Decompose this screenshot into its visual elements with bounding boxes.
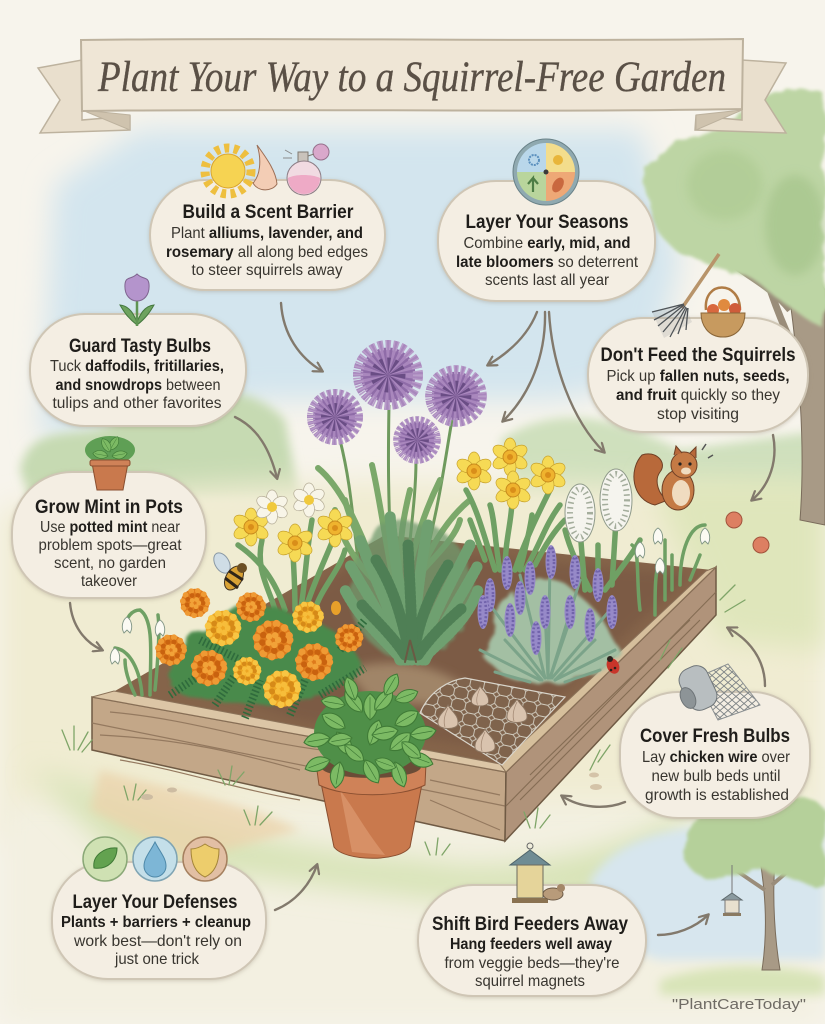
- heading: defenses: Layer Your Defenses: [72, 892, 238, 913]
- icon: shield badge: [183, 837, 227, 881]
- icon: water drop badge: [133, 837, 177, 881]
- icon: chicken wire roll: [675, 662, 760, 720]
- icon: perfume bottle: [283, 144, 329, 195]
- hyacinths: [565, 469, 640, 590]
- tree: upper right: [647, 88, 825, 525]
- heading: cover bulbs: Cover Fresh Bulbs: [640, 726, 790, 747]
- body: defenses: just one trick: [114, 951, 200, 968]
- panel: don't feed the squirrels: [588, 318, 808, 432]
- icon: small mint pot: [85, 435, 135, 490]
- lavender: [478, 545, 618, 683]
- body: bird feeders: [444, 936, 620, 990]
- body: bird feeders: from veggie beds—they're: [444, 955, 620, 972]
- small tree: lower right: [683, 795, 825, 970]
- icon: basket of fruit: [701, 288, 745, 337]
- body: defenses: Plants + barriers + cleanup: [61, 914, 251, 931]
- body: scent barrier: Plant alliums, lavender, and: [171, 225, 363, 242]
- snowdrops right: [632, 525, 710, 615]
- icon: tulip: [120, 274, 154, 326]
- body: mint: problem spots—great: [38, 537, 182, 554]
- body: mint: Use potted mint near: [40, 519, 181, 536]
- panel: build a scent barrier: [150, 180, 385, 290]
- body: cover bulbs: [642, 749, 791, 804]
- body: cover bulbs: growth is established: [645, 787, 789, 804]
- chicken wire with bulbs: [420, 678, 565, 765]
- body: guard bulbs: tulips and other favorites: [52, 395, 222, 412]
- panel: layer your defenses: [52, 862, 266, 979]
- body: don't feed: stop visiting: [657, 406, 739, 423]
- body: seasons: late bloomers so deterrent: [456, 254, 639, 271]
- watermark credit: "PlantCareToday": [672, 996, 806, 1013]
- heading: bird feeders: Shift Bird Feeders Away: [432, 914, 628, 935]
- ladybug: [604, 656, 622, 676]
- body: guard bulbs: and snowdrops between: [56, 377, 220, 394]
- body: mint: [38, 519, 182, 590]
- panel: grow mint in pots: [12, 472, 206, 598]
- panel: guard tasty bulbs: [30, 314, 246, 426]
- body: scent barrier: to steer squirrels away: [192, 262, 342, 279]
- title text: Plant Your Way to a Squirrel-Free Garden: [97, 54, 726, 101]
- icon: rake: [652, 254, 719, 338]
- icon: leaf badge: [83, 837, 127, 881]
- bed right wall: [505, 567, 716, 841]
- snowdrops left: [110, 610, 165, 695]
- banner body: [81, 39, 743, 111]
- body: guard bulbs: [50, 358, 224, 412]
- hanging feeder: [722, 865, 742, 916]
- panel: layer your seasons: [438, 181, 655, 301]
- body: defenses: [61, 914, 251, 968]
- body: don't feed: and fruit quickly so they: [616, 387, 780, 404]
- bed left wall: [92, 697, 506, 841]
- title banner: [38, 39, 786, 133]
- icon: bird feeder: [510, 843, 565, 903]
- body: seasons: scents last all year: [485, 272, 610, 289]
- icon: nose: [253, 145, 277, 190]
- body: seasons: Combine early, mid, and: [464, 235, 630, 252]
- alliums: [311, 345, 482, 590]
- icon: seasons clock: [513, 139, 579, 205]
- bed soil: [108, 535, 712, 770]
- terracotta pot: [316, 756, 426, 858]
- body: cover bulbs: new bulb beds until: [652, 768, 780, 785]
- heading: scent barrier: Build a Scent Barrier: [182, 202, 354, 223]
- grass tufts and pebbles: [62, 585, 745, 855]
- heading: guard bulbs: Guard Tasty Bulbs: [69, 336, 211, 357]
- right ribbon tail: [695, 60, 786, 133]
- fallen apples: [726, 512, 769, 553]
- heading: mint: Grow Mint in Pots: [35, 497, 183, 518]
- heading: don't feed: Don't Feed the Squirrels: [600, 345, 796, 366]
- bee: [210, 550, 247, 593]
- body: bird feeders: squirrel magnets: [475, 973, 585, 990]
- raised garden bed: [92, 535, 716, 841]
- body: scent barrier: rosemary all along bed edges: [166, 244, 368, 261]
- left ribbon tail: [38, 60, 130, 133]
- arrows: [70, 303, 774, 935]
- daffodils left: [232, 483, 354, 612]
- body: scent barrier: [166, 225, 368, 279]
- daffodils right: [455, 438, 567, 570]
- rosemary: [345, 515, 478, 662]
- potted mint: [303, 671, 437, 858]
- body: don't feed: Pick up fallen nuts, seeds,: [606, 368, 790, 385]
- marigolds: [156, 589, 365, 718]
- icon: sun: [205, 148, 251, 194]
- body: bird feeders: Hang feeders well away: [450, 936, 612, 953]
- body: mint: scent, no garden: [54, 555, 166, 572]
- body: guard bulbs: Tuck daffodils, fritillaries,: [50, 358, 224, 375]
- body: seasons: [456, 235, 639, 289]
- body: cover bulbs: Lay chicken wire over: [642, 749, 791, 766]
- body: mint: takeover: [81, 573, 138, 590]
- squirrel: [634, 444, 713, 510]
- heading: seasons: Layer Your Seasons: [466, 212, 628, 233]
- panel: shift bird feeders away: [418, 885, 646, 996]
- body: don't feed: [606, 368, 790, 423]
- panel: cover fresh bulbs: [620, 692, 810, 818]
- body: defenses: work best—don't rely on: [73, 933, 242, 950]
